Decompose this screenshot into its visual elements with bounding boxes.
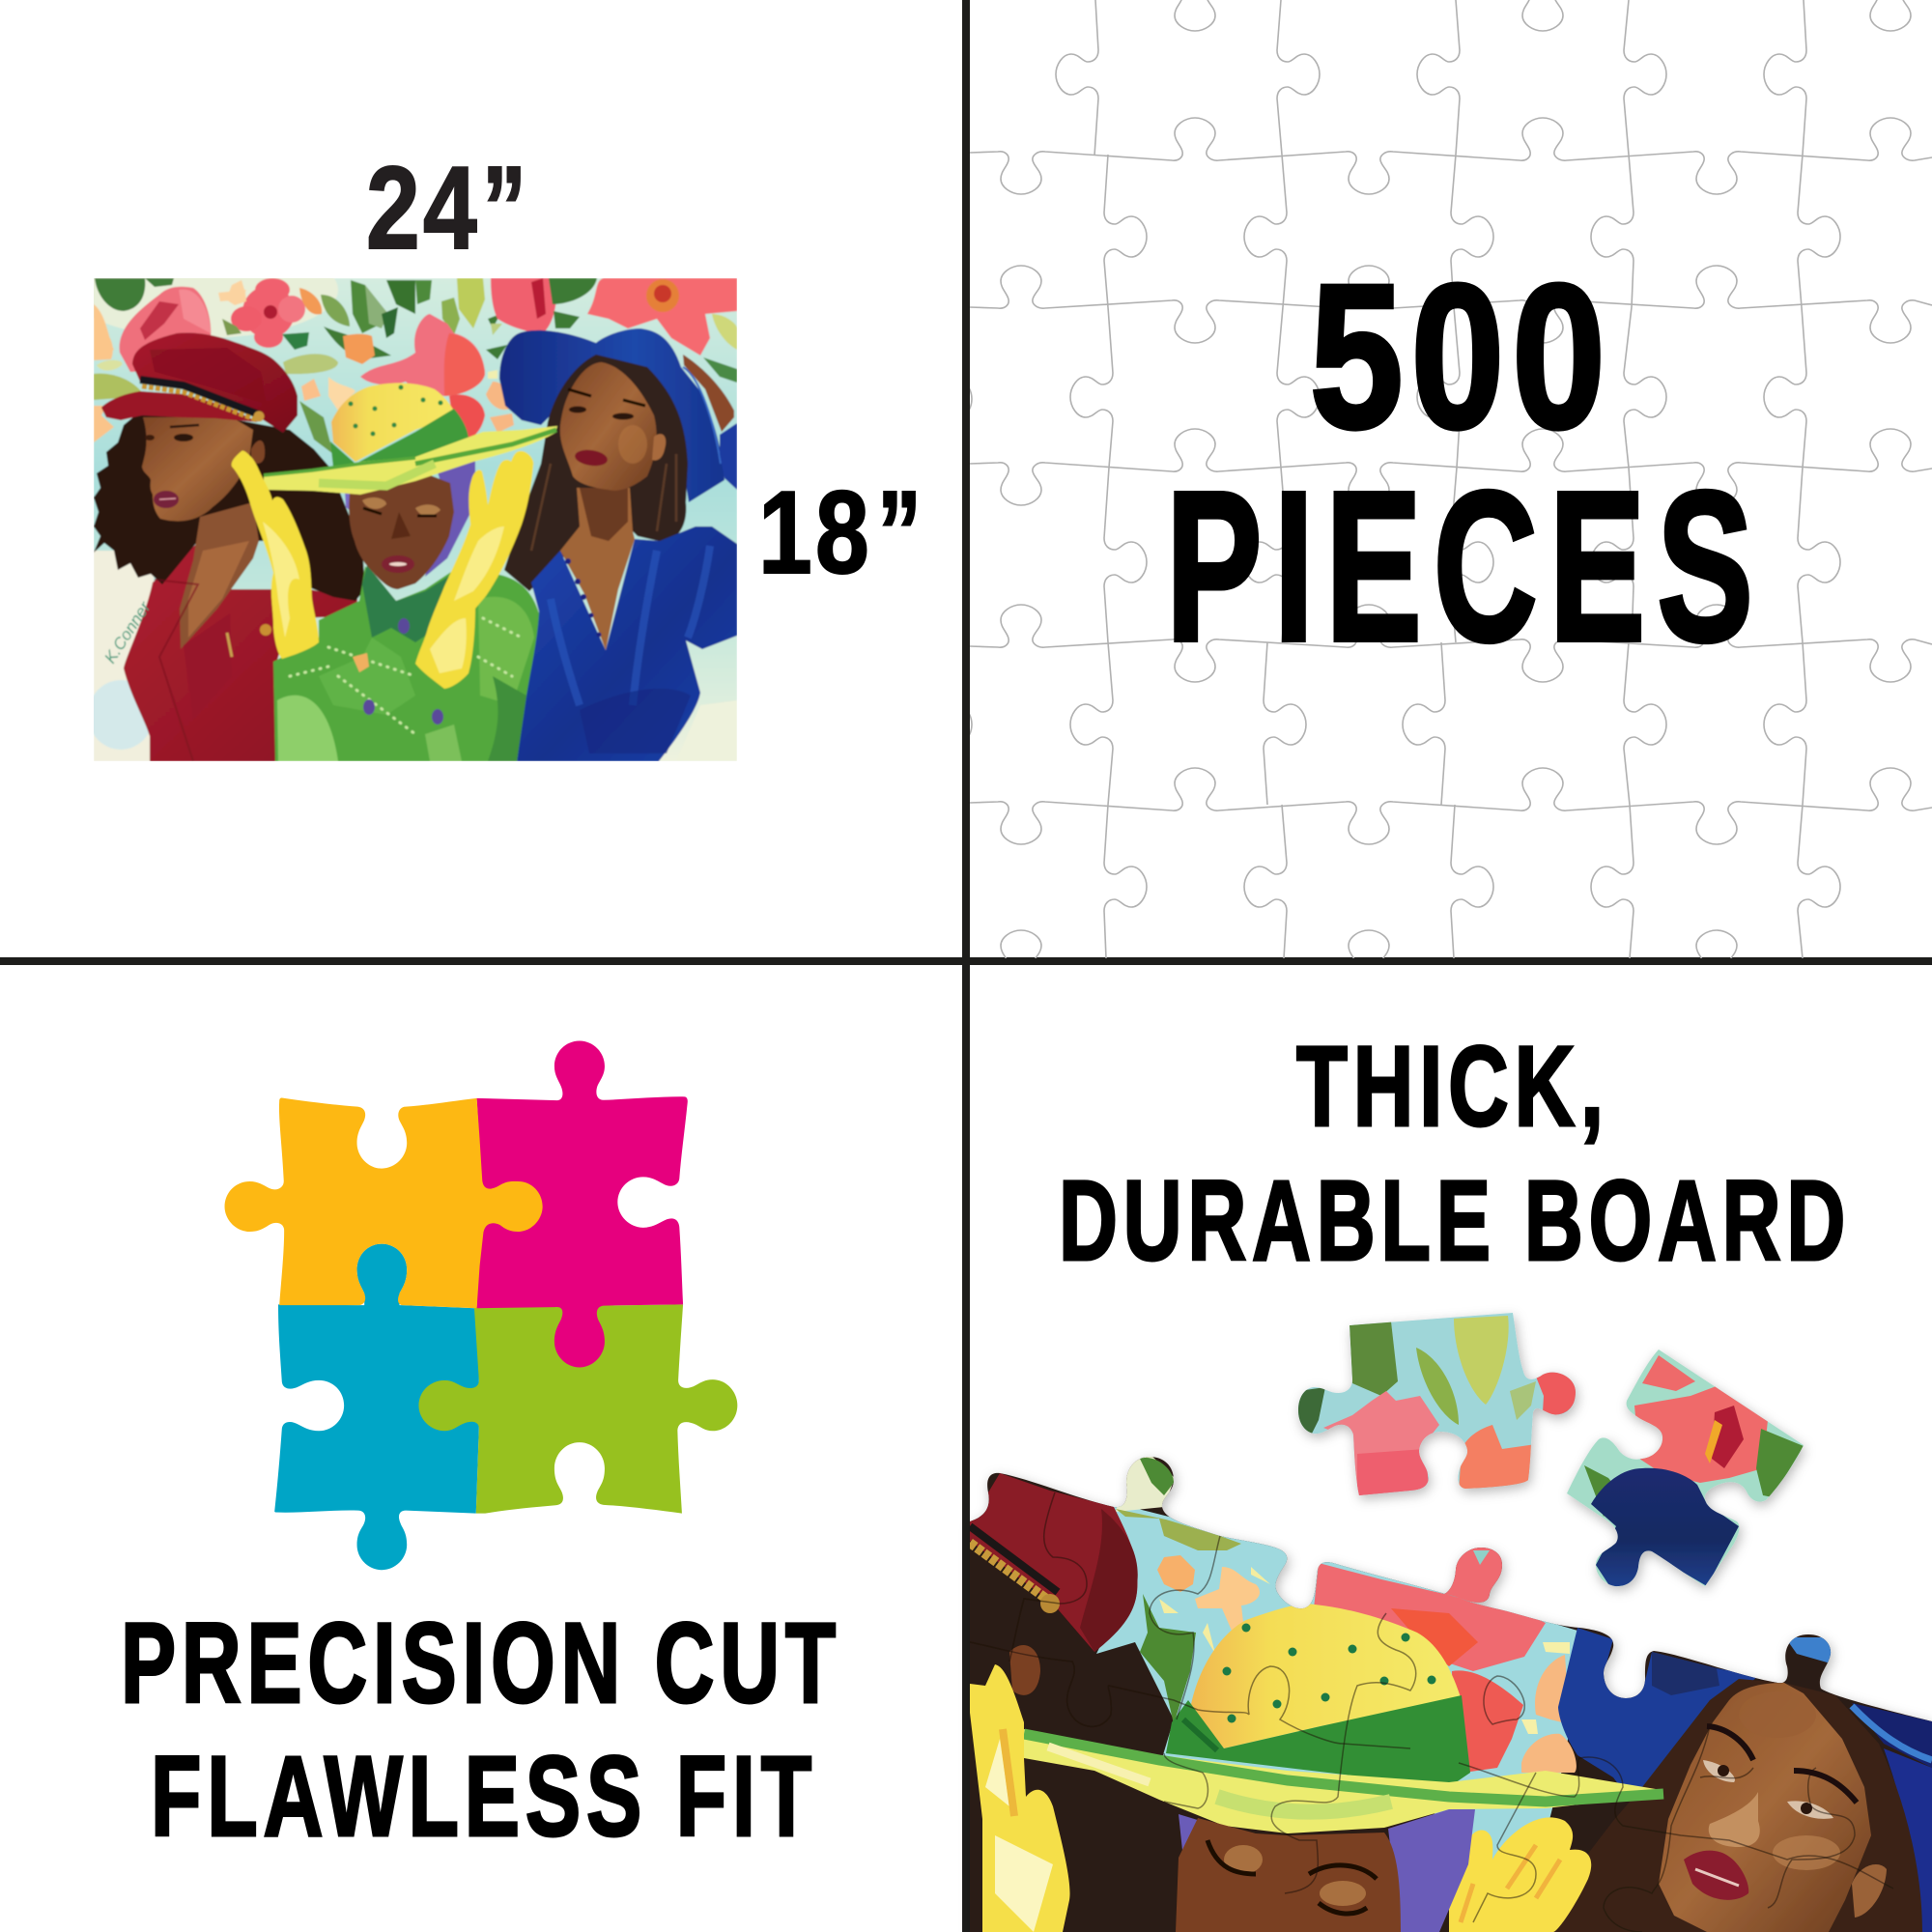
light blue knob — [1785, 1637, 1835, 1663]
hat brim — [264, 426, 557, 495]
green leaf — [1140, 1594, 1196, 1724]
dress buttons — [565, 558, 601, 638]
woman in red — [94, 333, 365, 761]
small brooch — [353, 653, 369, 672]
ear — [1009, 1645, 1040, 1695]
assembled puzzle close-up — [970, 1449, 1932, 1932]
coral flower — [1314, 1546, 1546, 1671]
red cap — [132, 333, 298, 433]
cap button — [1040, 1594, 1060, 1613]
headline: 500: 500 — [1310, 242, 1613, 470]
hat band — [330, 409, 469, 468]
navy hat area — [1591, 1468, 1739, 1587]
caption: precision cut: PRECISION CUT — [121, 1600, 841, 1727]
hat crown — [331, 384, 456, 462]
ear — [1852, 1864, 1887, 1918]
neck and chest — [180, 502, 259, 649]
teal background — [1096, 1502, 1584, 1932]
red cap — [970, 1473, 1137, 1652]
lips — [1684, 1851, 1748, 1900]
blue piece — [274, 1244, 479, 1570]
left glove — [232, 450, 319, 659]
face — [560, 362, 657, 491]
afro hair — [94, 411, 365, 601]
width label 24 inches: 24 — [366, 142, 480, 273]
hat band — [1166, 1695, 1470, 1787]
caption: flawless fit: FLAWLESS FIT — [151, 1733, 817, 1861]
right glove — [1449, 1817, 1591, 1932]
vertical divider — [962, 0, 970, 1932]
face — [142, 417, 253, 521]
lips — [382, 555, 414, 573]
hat brim — [1024, 1729, 1663, 1833]
cap braid — [970, 1543, 1053, 1604]
woman in green — [232, 384, 557, 761]
yellow piece — [225, 1097, 543, 1308]
hat right side — [1852, 1703, 1932, 1768]
width label 24 inches: ” — [482, 142, 526, 273]
peach fruit — [1521, 1655, 1577, 1773]
left glove — [970, 1664, 1070, 1932]
green piece — [418, 1304, 737, 1514]
panel: 500 pieces — [929, 0, 1932, 973]
jacket buttons — [363, 618, 443, 724]
floral backdrop — [94, 278, 737, 454]
dark hair base — [970, 1449, 1932, 1932]
blue hat — [499, 328, 724, 502]
peach flowers — [1157, 1555, 1195, 1592]
eyes and brows — [568, 389, 645, 406]
right glove — [415, 451, 533, 689]
hat crown — [1190, 1604, 1461, 1748]
eyes and brows — [1703, 1726, 1857, 1819]
height label 18 inches: 18 — [758, 467, 872, 598]
blue hat — [1558, 1628, 1758, 1816]
jigsaw outline pattern — [929, 0, 1932, 973]
cap brim — [101, 391, 258, 422]
neck and chest — [560, 488, 635, 650]
purple turban — [1179, 1809, 1475, 1932]
icon: four interlocking puzzle pieces — [225, 1041, 737, 1570]
raised hand — [683, 355, 734, 432]
blue dress — [517, 526, 737, 761]
red jacket — [124, 541, 357, 761]
jigsaw cut lines — [970, 1492, 1893, 1932]
red petals — [1452, 1670, 1523, 1773]
olive leaf — [1116, 1509, 1241, 1550]
green jacket — [273, 566, 539, 761]
heading line: thick: THICK, — [1296, 1023, 1609, 1151]
horizontal divider — [0, 957, 1932, 965]
loose puzzle piece: hat and flower — [1565, 1348, 1806, 1589]
face — [349, 473, 454, 589]
panel: precision cut — [121, 1041, 841, 1861]
panel: thick durable board — [970, 1023, 1932, 1932]
magenta piece — [477, 1041, 688, 1367]
knob with leaf — [1116, 1454, 1175, 1512]
hat beads — [1223, 1623, 1435, 1723]
jacket details — [155, 580, 198, 761]
long hair — [1550, 1679, 1922, 1932]
closed-eye face — [1176, 1818, 1401, 1932]
lips — [574, 449, 609, 467]
watercolor background — [94, 278, 737, 761]
puzzle artwork: three women in hats — [94, 278, 737, 761]
panel: puzzle size — [68, 142, 922, 761]
turban — [425, 456, 475, 577]
long hair — [504, 355, 688, 591]
cap button — [253, 412, 265, 421]
height label 18 inches: ” — [877, 467, 922, 598]
loose puzzle piece: floral — [1294, 1309, 1579, 1497]
face — [1659, 1683, 1871, 1932]
woman in blue — [499, 328, 737, 761]
nose — [1709, 1792, 1760, 1847]
cap band — [140, 380, 261, 415]
sleeve — [720, 423, 737, 490]
signature: K.Conner — [100, 597, 155, 667]
